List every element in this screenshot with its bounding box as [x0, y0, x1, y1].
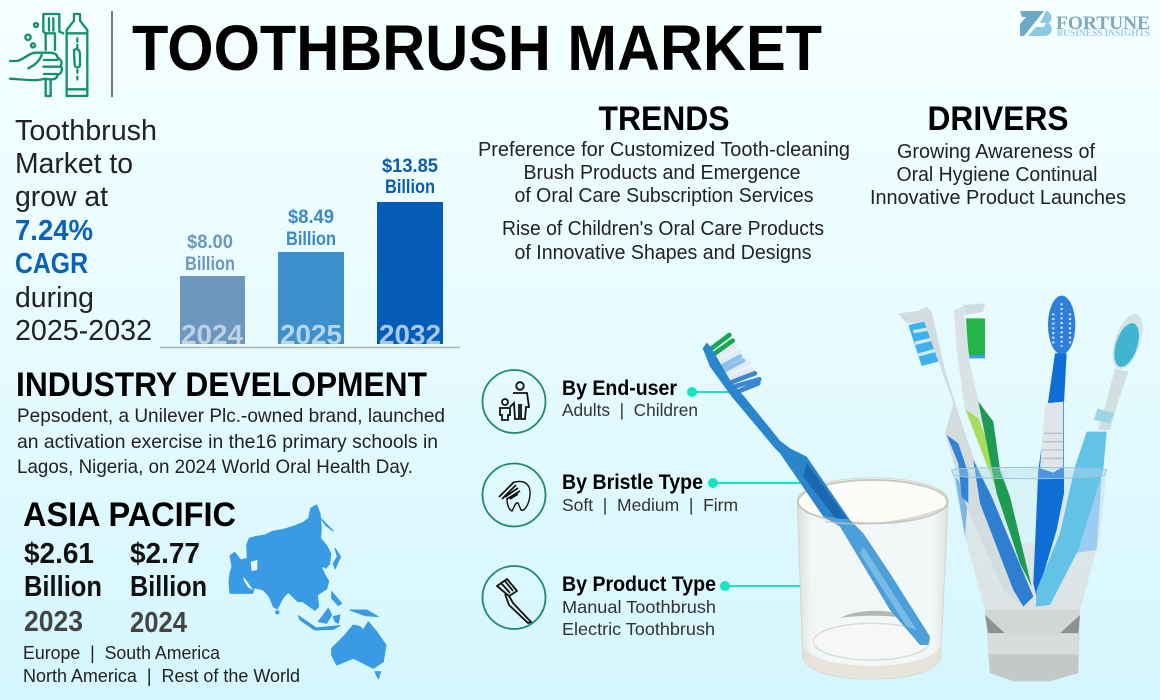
text block: CAGR summary — [15, 115, 157, 347]
stat: 2024 value — [130, 538, 207, 639]
toothbrush: green — [954, 303, 1032, 587]
panel: trends: Preference for Customized Tooth-cleaning — [478, 139, 850, 161]
bar 2025: 2025 — [280, 319, 342, 350]
panel: trends — [478, 100, 850, 264]
panel: trends: of Oral Care Subscription Services — [514, 185, 814, 207]
segment: by end-user: By End-user — [562, 377, 677, 400]
stat: 2023 value: $2.61 — [24, 538, 94, 570]
text block: CAGR summary: 2025-2032 — [15, 315, 152, 347]
panel: trends: Rise of Children's Oral Care Products — [502, 218, 824, 240]
bar 2032: 2032 — [379, 319, 441, 350]
bar 2032 — [377, 156, 443, 350]
panel: industry development: Pepsodent, a Unilever Plc.-owned brand, launched — [17, 405, 445, 427]
panel: industry development: an activation exercise in the16 primary schools in — [17, 431, 438, 453]
text block: CAGR summary: grow at — [15, 181, 108, 213]
panel: trends: of Innovative Shapes and Designs — [514, 242, 812, 264]
text block: CAGR summary: Toothbrush — [15, 115, 157, 147]
segment: by bristle type: Soft | Medium | Firm — [562, 495, 738, 515]
heading: drivers: DRIVERS — [928, 100, 1068, 138]
segment: by bristle type — [482, 464, 802, 526]
illustration: glass with four toothbrushes — [898, 296, 1149, 682]
segment: by product type: By Product Type — [562, 573, 716, 596]
stat: 2024 value: 2024 — [130, 607, 187, 639]
title: TOOTHBRUSH MARKET — [132, 12, 822, 84]
stat: 2023 value — [24, 538, 102, 638]
segment: by product type: Manual Toothbrush — [562, 597, 716, 617]
glass body — [797, 478, 948, 679]
toothbrush: light blue — [1036, 310, 1149, 607]
bar 2025 — [278, 207, 344, 350]
icon: toothbrush — [497, 579, 531, 623]
icon: tooth and brush — [499, 482, 530, 511]
bar 2025: $8.49 — [288, 207, 334, 228]
bar 2025: Billion — [286, 229, 336, 250]
panel: industry development: Lagos, Nigeria, on 2024 World Oral Health Day. — [17, 456, 413, 478]
bar 2024: Billion — [185, 254, 235, 275]
toothbrush — [703, 335, 930, 645]
text: other regions — [23, 643, 300, 686]
bar 2024: $8.00 — [187, 232, 233, 253]
bar 2024: 2024 — [181, 319, 243, 350]
heading: trends: TRENDS — [598, 100, 730, 138]
bar 2024 — [180, 232, 245, 350]
stat: 2024 value: $2.77 — [130, 538, 200, 570]
logo: Fortune Business Insights: BUSINESS INSIGHTS — [1057, 28, 1150, 38]
text block: CAGR summary: CAGR — [15, 248, 88, 280]
text: other regions: North America | Rest of the World — [23, 666, 300, 686]
panel: drivers — [870, 100, 1126, 209]
segment: by end-user: Adults | Children — [562, 400, 698, 420]
panel: trends: Brush Products and Emergence — [524, 162, 800, 184]
heading: Asia Pacific: ASIA PACIFIC — [23, 496, 236, 534]
stat: 2024 value: Billion — [130, 571, 207, 603]
text: other regions: Europe | South America — [23, 643, 221, 663]
panel: drivers: Growing Awareness of — [897, 141, 1095, 163]
panel: drivers: Oral Hygiene Continual — [896, 164, 1098, 186]
text block: CAGR summary: Market to — [15, 148, 133, 180]
stat: 2023 value: Billion — [24, 571, 102, 603]
panel: drivers: Innovative Product Launches — [870, 187, 1126, 209]
logo: Fortune Business Insights — [1020, 11, 1150, 38]
segment: by bristle type: By Bristle Type — [562, 471, 703, 494]
bar chart: market size — [160, 156, 460, 350]
bar 2032: $13.85 — [382, 156, 438, 177]
segment: by product type — [482, 566, 800, 639]
panel: industry development — [16, 366, 445, 478]
text block: CAGR summary: 7.24% — [15, 215, 93, 247]
icon: adult and child — [500, 382, 529, 420]
illustration: glass with single blue toothbrush — [703, 335, 948, 679]
segment: by end-user — [482, 370, 732, 433]
glass back and base — [952, 467, 1107, 682]
text block: CAGR summary: during — [15, 282, 94, 314]
toothbrush: white and blue — [898, 307, 1033, 607]
logo: Fortune Business Insights: FORTUNE — [1056, 13, 1150, 34]
stat: 2023 value: 2023 — [24, 606, 83, 638]
map: Asia Pacific — [229, 505, 386, 679]
heading: industry development: INDUSTRY DEVELOPMENT — [16, 366, 427, 404]
toothbrush: dark blue — [1033, 296, 1075, 597]
bar 2032: Billion — [385, 177, 435, 198]
segment: by product type: Electric Toothbrush — [562, 619, 715, 639]
icon: hand holding toothbrush and toothpaste — [10, 14, 87, 96]
panel: Asia Pacific — [23, 496, 300, 686]
